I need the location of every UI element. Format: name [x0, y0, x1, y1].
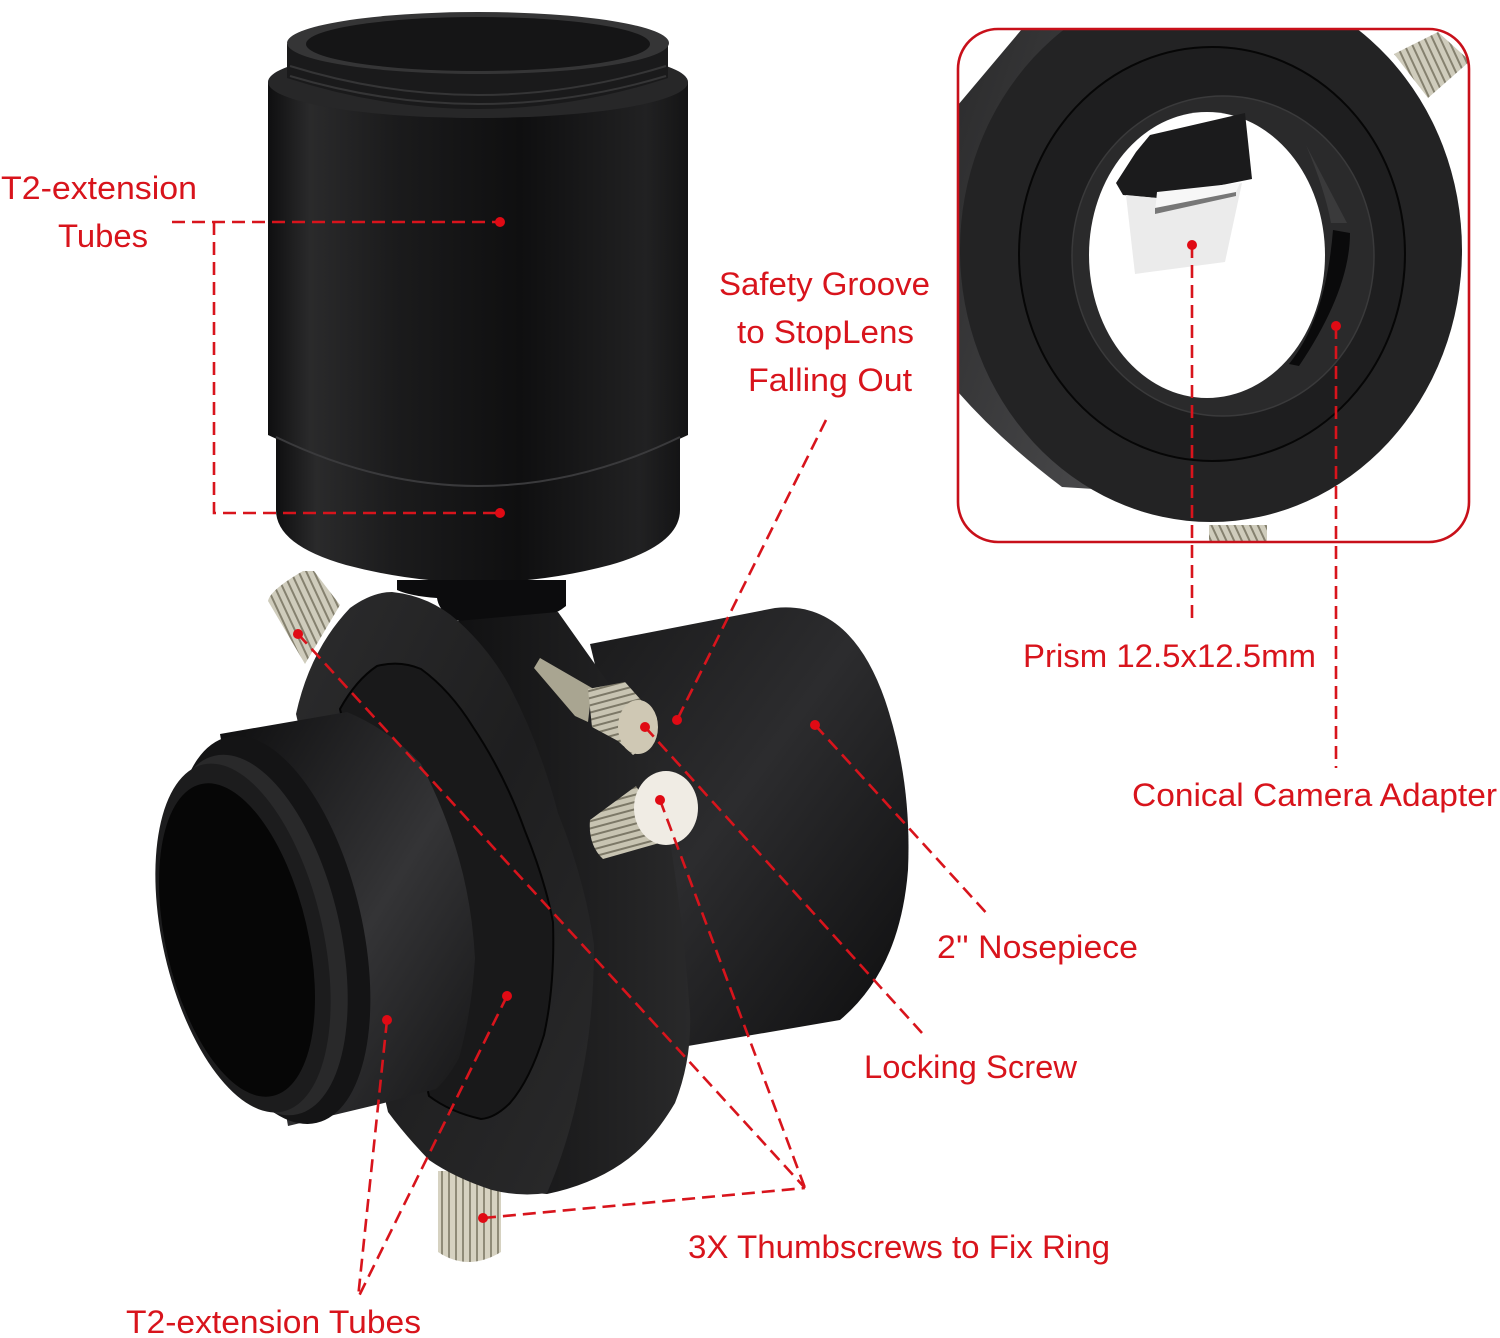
label: locking screw: Locking Screw: [864, 1049, 1078, 1085]
product: flange ring: [296, 592, 690, 1194]
product: T2 extension tube: [268, 12, 688, 582]
inset opening: [1089, 112, 1325, 398]
label: T2-extension Tubes top: [1, 170, 197, 254]
leader line: nosepiece: [815, 725, 990, 917]
inset slot: [1289, 230, 1350, 366]
icon: locking screw: [534, 658, 658, 755]
label: prism: Prism 12.5x12.5mm: [1023, 638, 1316, 674]
label: safety groove: Falling Out: [748, 362, 912, 398]
label: thumbscrews: 3X Thumbscrews to Fix Ring: [688, 1229, 1110, 1265]
prism: [1116, 113, 1252, 274]
label: T2-extension Tubes top: Tubes: [58, 218, 148, 254]
icon: lower thumbscrew: [438, 1171, 501, 1262]
callout dots: [293, 217, 1341, 1223]
label: safety groove: [719, 266, 930, 398]
leader lines: T2-extension tubes top: [172, 222, 500, 513]
label: T2-extension Tubes top: T2-extension: [1, 170, 197, 206]
product: T2 tube front section: [125, 712, 475, 1143]
label: nosepiece: 2'' Nosepiece: [937, 929, 1138, 965]
inset frame: [958, 29, 1469, 542]
product: connecting neck: [397, 580, 566, 625]
icon: inset thumbscrews: [1209, 32, 1468, 541]
product: 2 inch nosepiece: [590, 607, 909, 1046]
icon: upper left thumbscrew: [268, 571, 340, 664]
leader line: conical adapter: [1335, 326, 1337, 768]
leader lines: thumbscrews: [298, 634, 805, 1218]
leader line: safety groove: [677, 420, 826, 720]
inset outer ring: [960, 0, 1462, 522]
leader lines: T2-extension tubes bottom: [358, 996, 507, 1298]
label: safety groove: Safety Groove: [719, 266, 930, 302]
panel: inset ring detail: [958, 0, 1470, 545]
icon: front thumbscrew: [590, 771, 698, 859]
leader line: prism: [1191, 245, 1193, 622]
label: conical camera adapter: Conical Camera Adapter: [1132, 777, 1497, 813]
inset ring side wall: [959, 30, 1092, 489]
label: safety groove: to StopLens: [737, 314, 914, 350]
leader line: locking screw: [645, 727, 922, 1033]
